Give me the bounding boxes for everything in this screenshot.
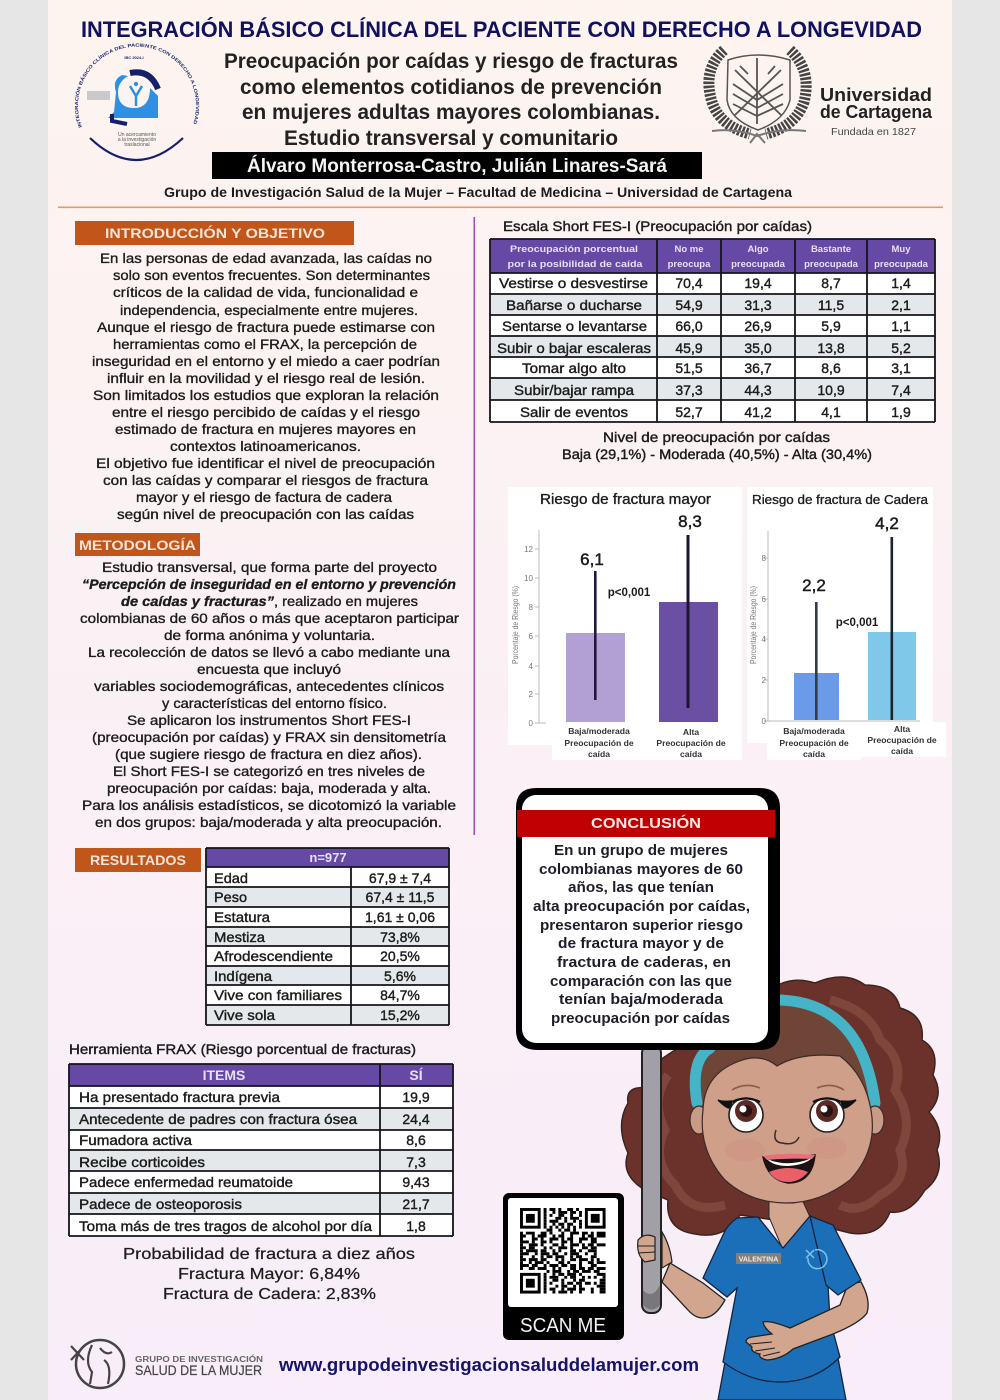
table: FRAX: Antecedente de padres con fractura ósea xyxy=(79,1111,357,1127)
university name: Fundada en 1827 xyxy=(831,126,916,138)
table: short FES-I: preocupa xyxy=(668,259,711,270)
heading: introducción y objetivo: INTRODUCCIÓN Y OBJETIVO xyxy=(105,224,325,241)
table: short FES-I: 19,4 xyxy=(744,275,772,291)
panel: conclusión xyxy=(516,788,780,1050)
chart: riesgo de fractura de cadera: 8 xyxy=(762,554,767,563)
heading: metodología xyxy=(75,533,200,556)
table: características n=977: Afrodescendiente xyxy=(214,948,333,964)
shirt emblem xyxy=(806,1250,827,1269)
text: introducción: independencia, especialmente entre mujeres. xyxy=(120,302,418,318)
text: metodología: y características del entorno físico. xyxy=(162,695,387,711)
chart: riesgo de fractura de cadera: 4,2 xyxy=(875,514,899,533)
text: metodología: encuesta que incluyó xyxy=(197,661,341,677)
table: short FES-I: 51,5 xyxy=(675,360,703,376)
hair top and fringe xyxy=(696,1005,878,1105)
text: introducción: con las caídas y comparar el riesgos de fractura xyxy=(103,472,428,488)
table: short FES-I: 11,5 xyxy=(818,297,844,313)
table: short FES-I: Algo xyxy=(747,244,769,255)
text: metodología: de caídas y fracturas” , realizado en mujeres xyxy=(121,593,418,609)
chart: riesgo de fractura de cadera: Alta xyxy=(894,724,910,734)
text: metodología: variables sociodemográficas, antecedentes clínicos xyxy=(94,678,444,694)
text: introducción: Son limitados los estudios que exploran la relación xyxy=(93,387,439,403)
chart: riesgo de fractura de cadera: Porcentaje de Riesgo (%) xyxy=(749,586,758,664)
subtitle: en mujeres adultas mayores colombianas. xyxy=(242,101,660,124)
chart: riesgo de fractura de cadera: 4 xyxy=(762,635,767,644)
chart: riesgo de fractura mayor: Preocupación de xyxy=(656,738,726,748)
logo: integración básico clínica: IBC 2024-I xyxy=(124,55,144,60)
chart: riesgo de fractura mayor: 6,1 xyxy=(580,550,604,569)
table: short FES-I: 3,1 xyxy=(891,360,911,376)
chart: riesgo de fractura mayor: 12 xyxy=(524,545,534,554)
table: short FES-I: preocupada xyxy=(804,259,859,270)
table: short FES-I: 44,3 xyxy=(744,382,772,398)
table: FRAX: 8,6 xyxy=(406,1132,426,1148)
chart: riesgo de fractura de cadera: 0 xyxy=(762,717,767,726)
text: introducción xyxy=(92,250,440,522)
chart: riesgo de fractura mayor: 0 xyxy=(529,719,534,728)
university name: de Cartagena xyxy=(820,101,933,122)
text: metodología: preocupación por caídas: baja, moderada y alta. xyxy=(107,780,431,796)
chart: riesgo de fractura mayor: 6 xyxy=(529,632,534,641)
table: short FES-I: 37,3 xyxy=(675,382,703,398)
text: introducción: El objetivo fue identificar el nivel de preocupación xyxy=(96,455,435,471)
table: short FES-I: Vestirse o desvestirse xyxy=(499,275,648,291)
text: metodología: en dos grupos: baja/moderada y alta preocupación. xyxy=(95,814,442,830)
text: metodología xyxy=(80,559,459,830)
panel: conclusión: CONCLUSIÓN xyxy=(591,814,701,832)
table: short FES-I: 45,9 xyxy=(675,340,703,356)
table: short FES-I: Sentarse o levantarse xyxy=(502,318,647,334)
table: short FES-I: 8,6 xyxy=(821,360,841,376)
table: short FES-I: 52,7 xyxy=(675,404,703,420)
table: FRAX: 24,4 xyxy=(402,1111,430,1127)
chart: riesgo de fractura de cadera: 2 xyxy=(762,676,767,685)
heading: resultados xyxy=(75,848,201,872)
panel: conclusión: tenían baja/moderada xyxy=(559,991,724,1008)
chart: riesgo de fractura de cadera xyxy=(747,487,946,760)
table: características n=977: 73,8% xyxy=(380,929,420,945)
QR code xyxy=(503,1193,624,1340)
logo: grupo de investigación: SALUD DE LA MUJER xyxy=(135,1362,262,1378)
logo: integración básico clínica: Un acercamiento xyxy=(118,132,156,138)
right sleeve xyxy=(810,1216,861,1295)
nose xyxy=(775,1130,799,1144)
text: nivel de preocupación xyxy=(562,429,872,462)
table: características n=977: 84,7% xyxy=(380,987,420,1003)
chart: riesgo de fractura mayor: Preocupación de xyxy=(564,738,634,748)
table: short FES-I: Tomar algo alto xyxy=(522,360,626,376)
table: short FES-I: 4,1 xyxy=(821,404,841,420)
table: características n=977 xyxy=(206,848,449,1025)
text: metodología: Para los análisis estadísticos, se dicotomizó la variable xyxy=(82,797,456,813)
text: metodología: Se aplicaron los instrumentos Short FES-I xyxy=(127,712,411,728)
chart: riesgo de fractura de cadera: Riesgo de fractura de Cadera xyxy=(752,492,929,507)
panel: conclusión: presentaron superior riesgo xyxy=(540,917,743,934)
text: metodología: La recolección de datos se llevó a cabo mediante una xyxy=(88,644,450,660)
eyebrows xyxy=(732,1085,844,1090)
table: short FES-I: 5,9 xyxy=(821,318,841,334)
table: short FES-I: Subir o bajar escaleras xyxy=(497,340,651,356)
panel: conclusión: fractura de caderas, en xyxy=(557,954,731,971)
text: introducción: según nivel de preocupación con las caídas xyxy=(117,506,414,522)
table: FRAX xyxy=(69,1064,453,1236)
chart: riesgo de fractura mayor: Porcentaje de Riesgo (%) xyxy=(511,586,520,664)
text: introducción: Aunque el riesgo de fractura puede estimarse con xyxy=(97,319,435,335)
chart: riesgo de fractura de cadera: Baja/moderada xyxy=(783,726,845,736)
subtitle xyxy=(224,50,678,150)
table: short FES-I: 8,7 xyxy=(821,275,841,291)
face xyxy=(702,1055,872,1203)
chart: riesgo de fractura mayor: 10 xyxy=(524,574,534,583)
affiliation: Grupo de Investigación Salud de la Mujer – Facultad de Medicina – Universidad de Cartagena xyxy=(164,184,792,200)
table: short FES-I: 1,1 xyxy=(891,318,911,334)
chart: riesgo de fractura mayor xyxy=(508,487,742,760)
table: características n=977: Indígena xyxy=(214,968,272,984)
table: FRAX: Padece de osteoporosis xyxy=(79,1196,242,1212)
table: short FES-I: 1,9 xyxy=(891,404,911,420)
heading: introducción y objetivo xyxy=(75,221,354,245)
chart: riesgo de fractura mayor: Riesgo de fractura mayor xyxy=(540,492,711,508)
heading: herramienta FRAX: Herramienta FRAX (Riesgo porcentual de fracturas) xyxy=(69,1041,416,1057)
text: metodología: (que sugiere riesgo de fractura en diez años). xyxy=(115,746,422,762)
chart: riesgo de fractura mayor: Baja/moderada xyxy=(568,726,630,736)
table: características n=977: n=977 xyxy=(309,850,347,865)
chart: riesgo de fractura mayor: Alta xyxy=(683,727,699,737)
text: metodología: (preocupación por caídas) y FRAX sin densitometría xyxy=(92,729,446,745)
table: short FES-I: Subir/bajar rampa xyxy=(514,382,634,398)
university name xyxy=(820,84,933,138)
mouth xyxy=(763,1154,815,1183)
table: short FES-I: Bastante xyxy=(811,244,851,255)
table: short FES-I: 13,8 xyxy=(817,340,845,356)
text: introducción: entre el riesgo percibido de caídas y el riesgo xyxy=(112,404,420,420)
table: FRAX: Padece enfermedad reumatoide xyxy=(79,1174,293,1190)
text: metodología: de forma anónima y voluntaria. xyxy=(164,627,375,643)
table: características n=977: 15,2% xyxy=(380,1007,420,1023)
table: características n=977: 5,6% xyxy=(384,968,416,984)
text: probabilidad de fractura xyxy=(123,1246,415,1303)
headband xyxy=(695,1000,875,1103)
chart: riesgo de fractura de cadera: 2,2 xyxy=(802,576,826,595)
table: FRAX: Toma más de tres tragos de alcohol por día xyxy=(79,1218,372,1234)
text: probabilidad de fractura: Fractura Mayor: 6,84% xyxy=(178,1266,360,1283)
chart: riesgo de fractura de cadera: p<0,001 xyxy=(836,617,879,629)
table: short FES-I: 41,2 xyxy=(744,404,772,420)
text: introducción: solo son eventos frecuentes. Son determinantes xyxy=(113,267,430,283)
table: FRAX: 7,3 xyxy=(406,1154,426,1170)
subtitle: como elementos cotidianos de prevención xyxy=(240,76,662,99)
heading: metodología: METODOLOGÍA xyxy=(79,537,196,553)
text: nivel de preocupación: Baja (29,1%) - Moderada (40,5%) - Alta (30,4%) xyxy=(562,446,872,462)
table: características n=977: Mestiza xyxy=(214,929,265,945)
table: FRAX: Ha presentado fractura previa xyxy=(79,1089,280,1105)
chart: riesgo de fractura mayor: 8,3 xyxy=(678,512,702,531)
table: short FES-I: por la posibilidad de caída xyxy=(508,259,643,270)
chart: riesgo de fractura de cadera: caída xyxy=(803,749,825,759)
table: short FES-I: No me xyxy=(674,244,704,255)
text: metodología: El Short FES-I se categorizó en tres niveles de xyxy=(113,763,425,779)
panel: conclusión: años, las que tenían xyxy=(568,879,714,896)
logo: grupo de investigación: GRUPO DE INVESTIGACIÓN xyxy=(135,1355,263,1364)
logo: integración básico clínica: traslacional xyxy=(124,142,150,148)
text: introducción: estimado de fractura en mujeres mayores en xyxy=(115,421,416,437)
heading: resultados: RESULTADOS xyxy=(90,852,186,868)
panel: conclusión: colombianas mayores de 60 xyxy=(539,861,743,878)
text: metodología: “Percepción de inseguridad en el entorno y prevención xyxy=(82,576,456,592)
chart: riesgo de fractura de cadera: Preocupación de xyxy=(779,738,849,748)
subtitle: Preocupación por caídas y riesgo de fracturas xyxy=(224,50,678,73)
table: características n=977: Edad xyxy=(214,870,248,886)
logo: Universidad de Cartagena crest xyxy=(709,50,806,143)
table: características n=977: Vive sola xyxy=(214,1007,275,1023)
panel: conclusión: de fractura mayor y de xyxy=(558,935,724,952)
table: short FES-I: 70,4 xyxy=(675,275,703,291)
eyes xyxy=(718,1098,856,1132)
logo: integración básico clínica: a la investigación xyxy=(118,137,156,143)
text: introducción: inseguridad en el entorno y el miedo a caer podrían xyxy=(92,353,440,369)
left arm xyxy=(662,1263,725,1318)
logo: grupo de investigación xyxy=(71,1340,263,1388)
table: short FES-I: 1,4 xyxy=(891,275,911,291)
text: introducción: influir en la movilidad y el riesgo real de lesión. xyxy=(107,370,425,386)
chart: riesgo de fractura mayor: 4 xyxy=(529,662,534,671)
text: metodología: Estudio transversal, que forma parte del proyecto xyxy=(102,559,437,575)
table: FRAX: 19,9 xyxy=(402,1089,430,1105)
logo: integración básico clínica: INTEGRACIÓN BÁSICO CLÍNICA DEL PACIENTE CON DERECHO A LONGEVIDAD xyxy=(74,43,200,128)
text: introducción: mayor y el riesgo de factura de cadera xyxy=(136,489,392,505)
text: introducción: críticos de la calidad de vida, funcionalidad e xyxy=(113,284,418,300)
chart: riesgo de fractura de cadera: caída xyxy=(891,746,913,756)
table: short FES-I: 5,2 xyxy=(891,340,911,356)
table: short FES-I: 31,3 xyxy=(744,297,772,313)
text: nivel de preocupación: Nivel de preocupación por caídas xyxy=(603,429,830,445)
table: short FES-I: 2,1 xyxy=(891,297,911,313)
chart: riesgo de fractura mayor: caída xyxy=(588,749,610,759)
text: probabilidad de fractura: Fractura de Cadera: 2,83% xyxy=(163,1286,376,1303)
table: short FES-I: preocupada xyxy=(874,259,929,270)
table: características n=977: Vive con familiares xyxy=(214,987,342,1003)
panel: conclusión: alta preocupación por caídas, xyxy=(533,898,750,915)
table: short FES-I: 10,9 xyxy=(817,382,845,398)
table: FRAX: ITEMS xyxy=(203,1067,245,1083)
table: FRAX: Fumadora activa xyxy=(79,1132,192,1148)
text: probabilidad de fractura: Probabilidad de fractura a diez años xyxy=(123,1246,415,1263)
table: FRAX: 21,7 xyxy=(402,1196,430,1212)
text: introducción: herramientas como el FRAX, la percepción de xyxy=(113,336,417,352)
hair xyxy=(622,977,940,1235)
neck xyxy=(769,1195,810,1250)
subtitle: Estudio transversal y comunitario xyxy=(284,127,618,150)
table: FRAX: 1,8 xyxy=(406,1218,426,1234)
chart: riesgo de fractura mayor: p<0,001 xyxy=(608,587,651,599)
table: short FES-I: Bañarse o ducharse xyxy=(506,297,642,313)
right arm and hand on belly xyxy=(746,1282,868,1360)
hand on pole xyxy=(638,1232,672,1268)
table: short FES-I: preocupada xyxy=(731,259,786,270)
chart: riesgo de fractura de cadera: 6 xyxy=(762,595,767,604)
text: introducción: En las personas de edad avanzada, las caídas no xyxy=(100,250,432,266)
authors banner: Álvaro Monterrosa-Castro, Julián Linares-Sará xyxy=(247,155,667,177)
illustration: nurse Valentina xyxy=(622,977,940,1400)
table: FRAX: 9,43 xyxy=(402,1174,430,1190)
table: short FES-I: 7,4 xyxy=(891,382,911,398)
panel: conclusión: comparación con las que xyxy=(550,973,732,990)
text: metodología: colombianas de 60 años o más que aceptaron participar xyxy=(80,610,459,626)
panel: conclusión: preocupación por caídas xyxy=(551,1010,730,1027)
table: características n=977: 1,61 ± 0,06 xyxy=(365,909,435,925)
table: short FES-I: 66,0 xyxy=(675,318,703,334)
table: short FES-I: 36,7 xyxy=(744,360,772,376)
website url: www.grupodeinvestigacionsaluddelamujer.com xyxy=(278,1354,699,1375)
university name: Universidad xyxy=(820,84,932,105)
table: short FES-I: 54,9 xyxy=(675,297,703,313)
text: introducción: contextos latinoamericanos. xyxy=(170,438,361,454)
table: short FES-I: 35,0 xyxy=(744,340,772,356)
chart: riesgo de fractura mayor: 8 xyxy=(529,603,534,612)
ears xyxy=(690,1106,884,1134)
table: características n=977: Estatura xyxy=(214,909,270,925)
table: short FES-I: Muy xyxy=(892,244,911,255)
chart: riesgo de fractura de cadera: Preocupación de xyxy=(867,735,937,745)
table: características n=977: Peso xyxy=(214,889,247,905)
title: INTEGRACIÓN BÁSICO CLÍNICA DEL PACIENTE CON DERECHO A LONGEVIDAD xyxy=(81,17,922,42)
name tag: VALENTINA xyxy=(739,1256,778,1264)
table: características n=977: 20,5% xyxy=(380,948,420,964)
table: características n=977: 67,9 ± 7,4 xyxy=(369,870,431,886)
table: short FES-I: 26,9 xyxy=(744,318,772,334)
chart: riesgo de fractura mayor: 2 xyxy=(529,690,534,699)
table: short FES-I xyxy=(490,239,935,422)
panel: conclusión: En un grupo de mujeres xyxy=(554,842,728,859)
table: características n=977: 67,4 ± 11,5 xyxy=(366,889,435,905)
table: FRAX: Recibe corticoides xyxy=(79,1154,205,1170)
table: FRAX: SÍ xyxy=(409,1067,424,1083)
name tag xyxy=(736,1253,781,1264)
shirt and pants xyxy=(703,1216,846,1400)
sign pole xyxy=(642,1045,661,1313)
QR code: SCAN ME xyxy=(520,1315,606,1337)
heading: escala short FES-I: Escala Short FES-I (Preocupación por caídas) xyxy=(503,218,812,234)
blush xyxy=(725,1137,847,1161)
chart: riesgo de fractura mayor: caída xyxy=(680,749,702,759)
table: short FES-I: Salir de eventos xyxy=(520,404,628,420)
authors banner xyxy=(212,152,702,179)
table: short FES-I: Preocupación porcentual xyxy=(510,244,638,255)
